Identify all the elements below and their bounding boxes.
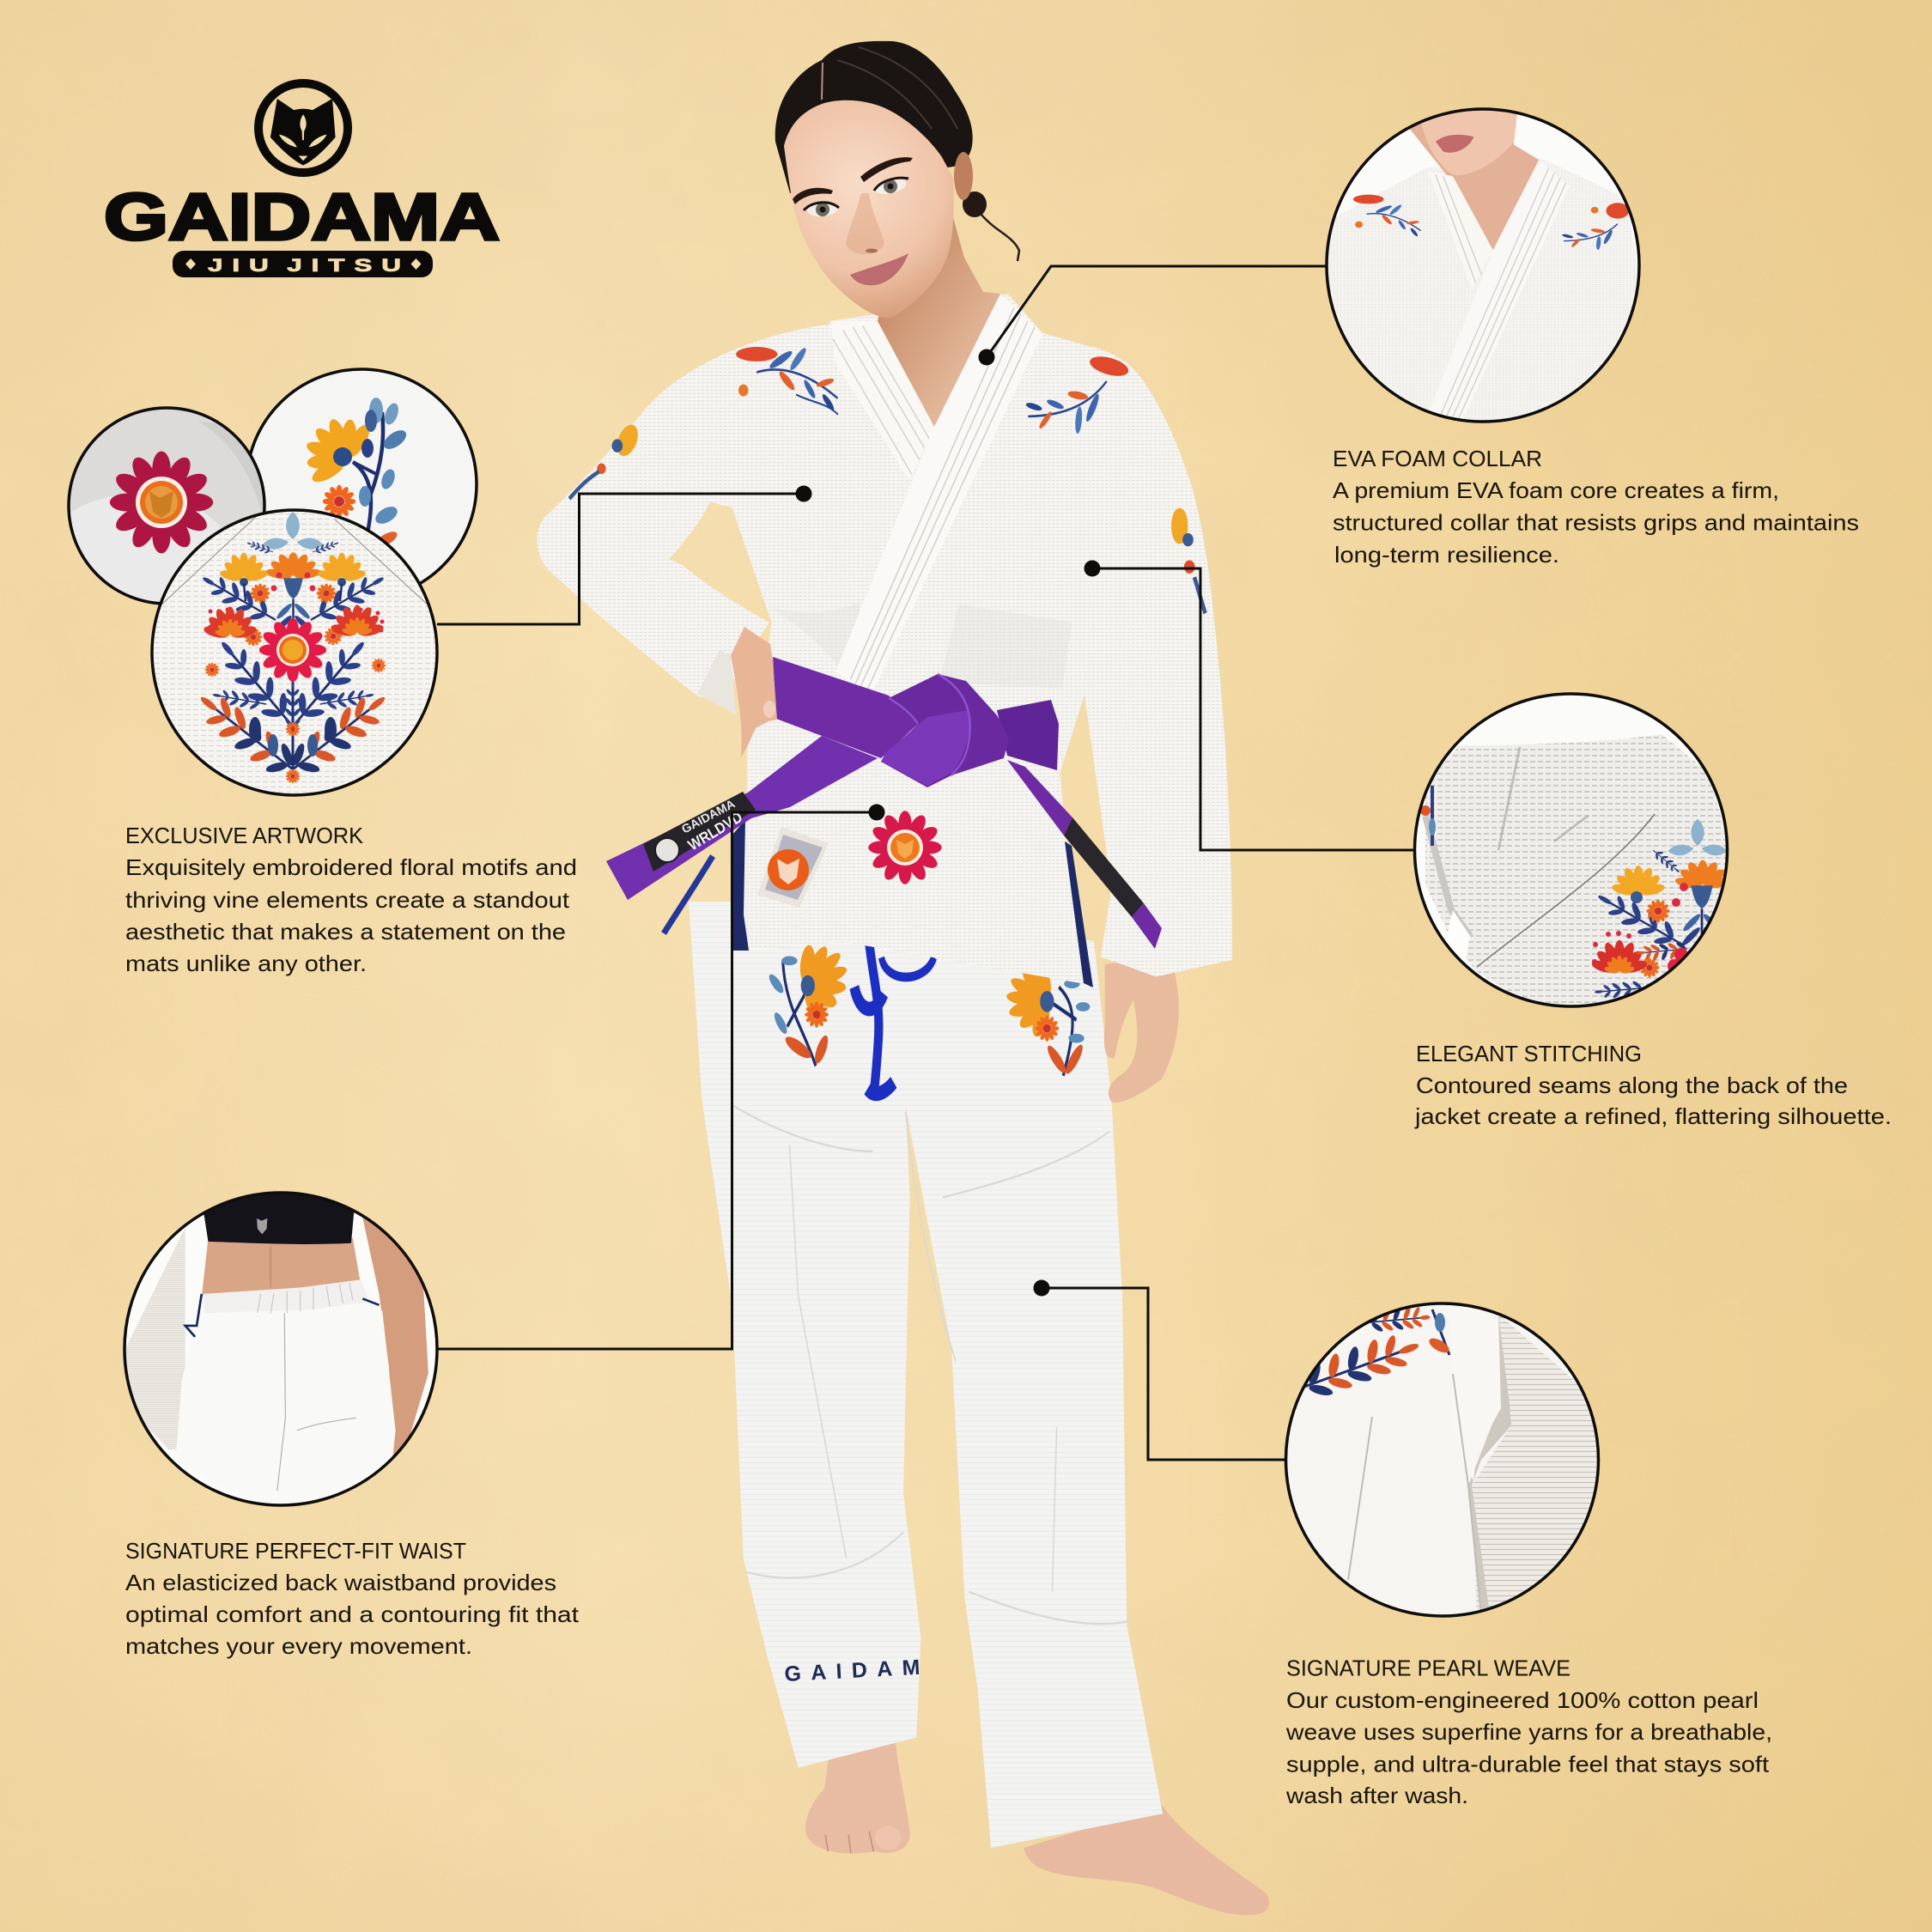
center panel [1448, 1303, 1501, 1481]
text: elegant stitching: ELEGANT STITCHING [1416, 1041, 1642, 1066]
eyebrows [793, 157, 913, 204]
seam [1348, 1374, 1481, 1614]
text: signature pearl weave [1285, 1656, 1772, 1808]
connector: artwork [437, 494, 804, 624]
central flower [259, 618, 326, 682]
fox mark [257, 1218, 267, 1234]
text: exclusive artwork: thriving vine elements create a standout [125, 887, 570, 913]
nostril [866, 249, 878, 252]
cord: drawstring [854, 934, 934, 1099]
hair back [775, 41, 973, 193]
text: EVA foam collar: EVA FOAM COLLAR [1333, 446, 1542, 471]
circle: embroidered vine detail [249, 368, 478, 584]
cuff branding text: GAIDAM [784, 1656, 920, 1686]
lower lapel [739, 764, 860, 934]
bottom V branches [188, 683, 304, 786]
text: signature perfect-fit waist [125, 1538, 580, 1659]
right lapel ribs [850, 307, 1035, 692]
embroidery: right shoulder [1024, 353, 1130, 449]
text: EVA foam collar [1333, 446, 1859, 568]
text: signature perfect-fit waist: matches your every movement. [125, 1633, 472, 1659]
logo: Gaidama Jiu Jitsu [104, 83, 500, 277]
text: signature pearl weave: Our custom-engineered 100% cotton pearl [1286, 1687, 1759, 1713]
embroidery right [1561, 203, 1629, 258]
elastic waistband [204, 1279, 369, 1313]
pants [689, 902, 1163, 1848]
fold shadow [1468, 1314, 1511, 1619]
embroidery: pants right [1005, 958, 1090, 1078]
bun and wisps [963, 191, 1019, 261]
embroidery: left shoulder [736, 331, 848, 415]
torso jacket [710, 294, 1151, 987]
connector: pearl weave [1042, 1288, 1286, 1460]
right ribbed panel [1472, 1314, 1606, 1623]
text: elegant stitching [1414, 1041, 1892, 1129]
text: EVA foam collar: A premium EVA foam core creates a firm, [1333, 477, 1779, 503]
belt back strap right [997, 700, 1059, 770]
connector dot: collar [979, 349, 994, 366]
embroidery left [1353, 195, 1430, 238]
belt black rank bar [1064, 817, 1144, 917]
right foot [1024, 1805, 1269, 1915]
circle: collar close-up [1322, 103, 1644, 431]
red-orange flowers [203, 606, 258, 640]
text: signature pearl weave: supple, and ultra-durable feel that stays soft [1286, 1752, 1770, 1777]
circle: elegant stitching [1408, 687, 1735, 1013]
belt tail end right [1132, 903, 1162, 949]
flowers right [1668, 819, 1727, 855]
orange crown [264, 552, 322, 580]
left lapel [1428, 172, 1493, 289]
small blossoms [205, 583, 386, 677]
nose [846, 193, 884, 254]
thumbnail [763, 701, 775, 718]
neck [1406, 106, 1539, 250]
text: signature pearl weave: weave uses superfine yarns for a breathable, [1285, 1719, 1772, 1745]
connector dot: pearl weave [1034, 1279, 1049, 1297]
text: elegant stitching: jacket create a refined, flattering silhouette. [1414, 1103, 1892, 1129]
pants folds and knee seams [732, 1105, 1131, 1624]
hair strands [837, 47, 957, 129]
belt label globe [655, 838, 679, 862]
belt label [643, 792, 756, 872]
arm [362, 1218, 428, 1462]
embroidery: pants left [768, 931, 854, 1066]
connector: stitching [1092, 568, 1415, 850]
jacket soft shadows [771, 601, 1072, 689]
black top [200, 1189, 356, 1244]
sleeve: right side of picture [1084, 360, 1232, 976]
left foot [805, 1743, 910, 1854]
right hand [1104, 957, 1179, 1103]
circle: full back embroidery [146, 507, 447, 803]
text: exclusive artwork: aesthetic that makes a statement on the [125, 919, 566, 945]
hand on hip [731, 627, 777, 757]
circle: floral logo patch [67, 406, 266, 605]
bottom blossoms [286, 722, 300, 736]
belt knot lighter wrap [881, 710, 970, 786]
text: exclusive artwork: Exquisitely embroidered floral motifs and [125, 854, 577, 880]
sleeve embroidery [1420, 786, 1436, 846]
embroidery: red flower [868, 811, 942, 884]
connector dot: waist [869, 804, 884, 821]
logo wordmark: GAIDAMA [104, 180, 500, 254]
sleeve cuff interior [697, 650, 736, 714]
lower blue branches [209, 631, 305, 737]
embroidery: right sleeve [1171, 507, 1206, 613]
text: signature pearl weave: wash after wash. [1285, 1783, 1468, 1808]
photo: woman's upper body in white gi jacket with purple belt [537, 41, 1232, 987]
belt tail left [606, 736, 878, 900]
text: signature perfect-fit waist: An elasticized back waistband provides [125, 1570, 556, 1595]
navy jacket tab [732, 820, 749, 951]
photo: woman's legs in white gi pants [689, 902, 1269, 1915]
text: exclusive artwork: mats unlike any other. [125, 951, 367, 976]
navy hem stripe [1065, 841, 1093, 987]
logo ring [258, 83, 348, 173]
jacket body [1322, 158, 1641, 431]
leaves [1297, 1324, 1425, 1405]
left lapel [830, 321, 934, 481]
navy cord [664, 856, 713, 933]
text: EVA foam collar: structured collar that resists grips and maintains [1333, 510, 1859, 536]
right lapel [835, 294, 1042, 696]
belt knot fold lines [889, 674, 970, 775]
trefoil top [263, 512, 323, 550]
face [784, 100, 954, 318]
lips [1436, 135, 1474, 153]
patch: jacket label [757, 827, 829, 908]
belt label text: GAIDAMA [679, 797, 737, 836]
left lapel ribs [833, 325, 929, 475]
lower back [202, 1238, 361, 1297]
ear [954, 152, 973, 200]
logo diamonds [185, 258, 421, 270]
belt knot [881, 674, 1009, 787]
text: EVA foam collar: long-term resilience. [1334, 542, 1559, 568]
pants [175, 1281, 396, 1510]
neck [878, 217, 1000, 427]
logo pill text: JIU JITSU [208, 255, 401, 276]
chin [1419, 106, 1518, 175]
logo fox head [270, 99, 336, 166]
connector dot: artwork [795, 486, 812, 501]
connector dot: stitching [1084, 560, 1101, 577]
eyes [804, 176, 908, 218]
text: signature pearl weave: SIGNATURE PEARL WEAVE [1286, 1656, 1571, 1681]
right lapel [1428, 160, 1570, 424]
belt label text 2: WRLDVD [685, 808, 745, 854]
logo pill [173, 251, 433, 277]
navy cord [185, 1294, 202, 1337]
side groups [203, 577, 276, 621]
text: signature perfect-fit waist: optimal comfort and a contouring fit that [125, 1601, 580, 1627]
hair part [822, 63, 823, 100]
text: exclusive artwork: EXCLUSIVE ARTWORK [125, 823, 364, 848]
belt strap left [773, 657, 918, 758]
red dots [208, 572, 385, 632]
embroidery: left sleeve [569, 421, 642, 499]
jacket, drawn in scaled crop coordinates [537, 294, 1232, 987]
text: elegant stitching: Contoured seams along the back of the [1416, 1072, 1848, 1098]
sleeve: bent arm [537, 324, 830, 698]
circle: perfect-fit waist [120, 1189, 442, 1511]
text: exclusive artwork [125, 823, 577, 976]
mouth [850, 253, 908, 285]
connector: collar [987, 266, 1327, 357]
connector: waist [436, 812, 877, 1349]
circle: signature pearl weave [1279, 1297, 1606, 1623]
belt tail right [1007, 760, 1072, 835]
left sleeve [123, 1227, 185, 1449]
text: signature perfect-fit waist: SIGNATURE PERFECT-FIT WAIST [125, 1538, 466, 1564]
